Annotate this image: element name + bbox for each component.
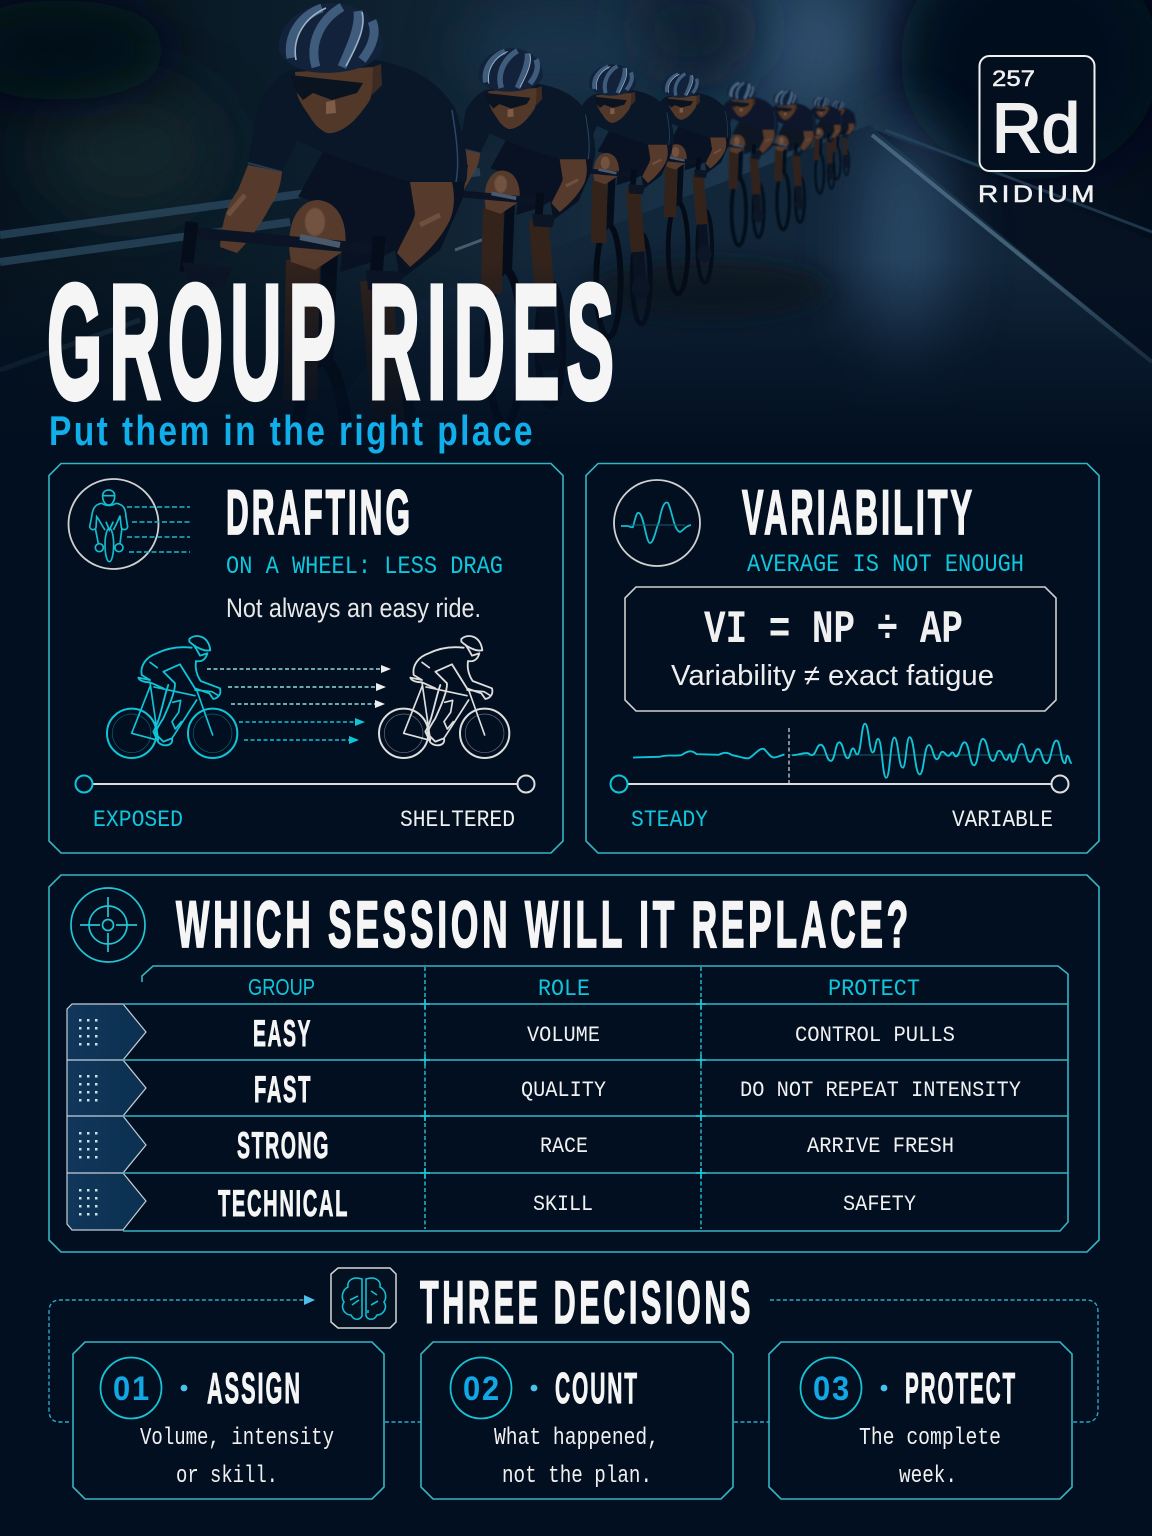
panel: drafting xyxy=(49,464,563,853)
illustration: cyclist exposed, cyan xyxy=(107,636,237,758)
logo: Ridium element tile: 257 xyxy=(992,66,1035,91)
illustration: cyclist sheltered, white xyxy=(379,636,509,758)
row: easy: CONTROL PULLS xyxy=(795,1023,955,1048)
row: strong xyxy=(237,1125,954,1166)
card: protect xyxy=(769,1342,1072,1499)
slider: steady to variable: VARIABLE xyxy=(952,807,1053,833)
card: count xyxy=(421,1342,733,1499)
row: easy xyxy=(253,1013,955,1054)
card: protect: PROTECT xyxy=(905,1364,1017,1413)
airflow arrows xyxy=(207,665,391,744)
row: strong: RACE xyxy=(540,1134,588,1159)
column headers xyxy=(248,974,920,1002)
card: protect: 03 xyxy=(813,1370,851,1408)
hero photo: cyclists in a paceline on a wet road xyxy=(0,0,1152,410)
formula box: VI = NP ÷ AP xyxy=(704,604,963,656)
card: assign: or skill. xyxy=(176,1463,278,1490)
card: assign: ASSIGN xyxy=(207,1364,302,1413)
icon: front-view rider with airflow xyxy=(68,479,190,569)
row: technical: SKILL xyxy=(533,1192,593,1217)
column headers: PROTECT xyxy=(828,976,920,1002)
row chips xyxy=(67,1004,146,1230)
logo: Ridium element tile: Rd xyxy=(992,89,1080,167)
card: assign xyxy=(73,1342,384,1499)
logo: Ridium element tile xyxy=(978,56,1098,208)
column headers: GROUP xyxy=(248,974,315,1000)
row: strong: STRONG xyxy=(237,1125,330,1166)
icon: brain xyxy=(331,1268,396,1328)
note: Not always an easy ride. xyxy=(226,593,481,623)
tagline: ON A WHEEL: LESS DRAG xyxy=(226,552,503,581)
heading: THREE DECISIONS xyxy=(420,1269,754,1336)
panel: variability xyxy=(586,464,1099,853)
formula box: Variability ≠ exact fatigue xyxy=(671,660,994,692)
panel: which session will it replace xyxy=(49,875,1099,1252)
card: count: What happened, xyxy=(494,1425,659,1452)
slider: exposed to sheltered: EXPOSED xyxy=(93,807,183,833)
subtitle: Put them in the right place xyxy=(49,407,535,454)
logo: Ridium element tile: RIDIUM xyxy=(978,181,1098,208)
dashed connector xyxy=(49,1295,1098,1422)
slider: exposed to sheltered: SHELTERED xyxy=(400,807,515,833)
icon: target xyxy=(71,888,145,962)
formula box xyxy=(625,587,1056,711)
icon: wave in circle xyxy=(614,480,700,566)
section: three decisions xyxy=(49,1268,1098,1499)
row: fast: DO NOT REPEAT INTENSITY xyxy=(740,1078,1021,1103)
card: assign: Volume, intensity xyxy=(140,1425,334,1452)
card: count: not the plan. xyxy=(502,1463,652,1490)
row: strong: ARRIVE FRESH xyxy=(807,1134,954,1159)
card: protect: The complete xyxy=(859,1425,1001,1452)
slider: steady to variable: STEADY xyxy=(631,807,708,833)
column headers: ROLE xyxy=(538,976,590,1002)
row: technical xyxy=(218,1183,916,1224)
table xyxy=(67,966,1068,1231)
card: assign: 01 xyxy=(113,1370,151,1408)
card: count: COUNT xyxy=(555,1364,639,1413)
row: technical: SAFETY xyxy=(843,1192,916,1217)
row: fast xyxy=(254,1069,1021,1110)
power trace chart xyxy=(633,724,1072,785)
row: fast: QUALITY xyxy=(521,1078,606,1103)
row: technical: TECHNICAL xyxy=(218,1183,349,1224)
tagline: AVERAGE IS NOT ENOUGH xyxy=(747,550,1024,579)
slider: steady to variable xyxy=(610,776,1068,833)
heading: DRAFTING xyxy=(226,478,413,548)
card: count: 02 xyxy=(463,1370,501,1408)
row: easy: EASY xyxy=(253,1013,312,1054)
slider: exposed to sheltered xyxy=(76,776,534,833)
row: fast: FAST xyxy=(254,1069,312,1110)
card: protect: week. xyxy=(899,1463,957,1490)
row: easy: VOLUME xyxy=(527,1023,600,1048)
